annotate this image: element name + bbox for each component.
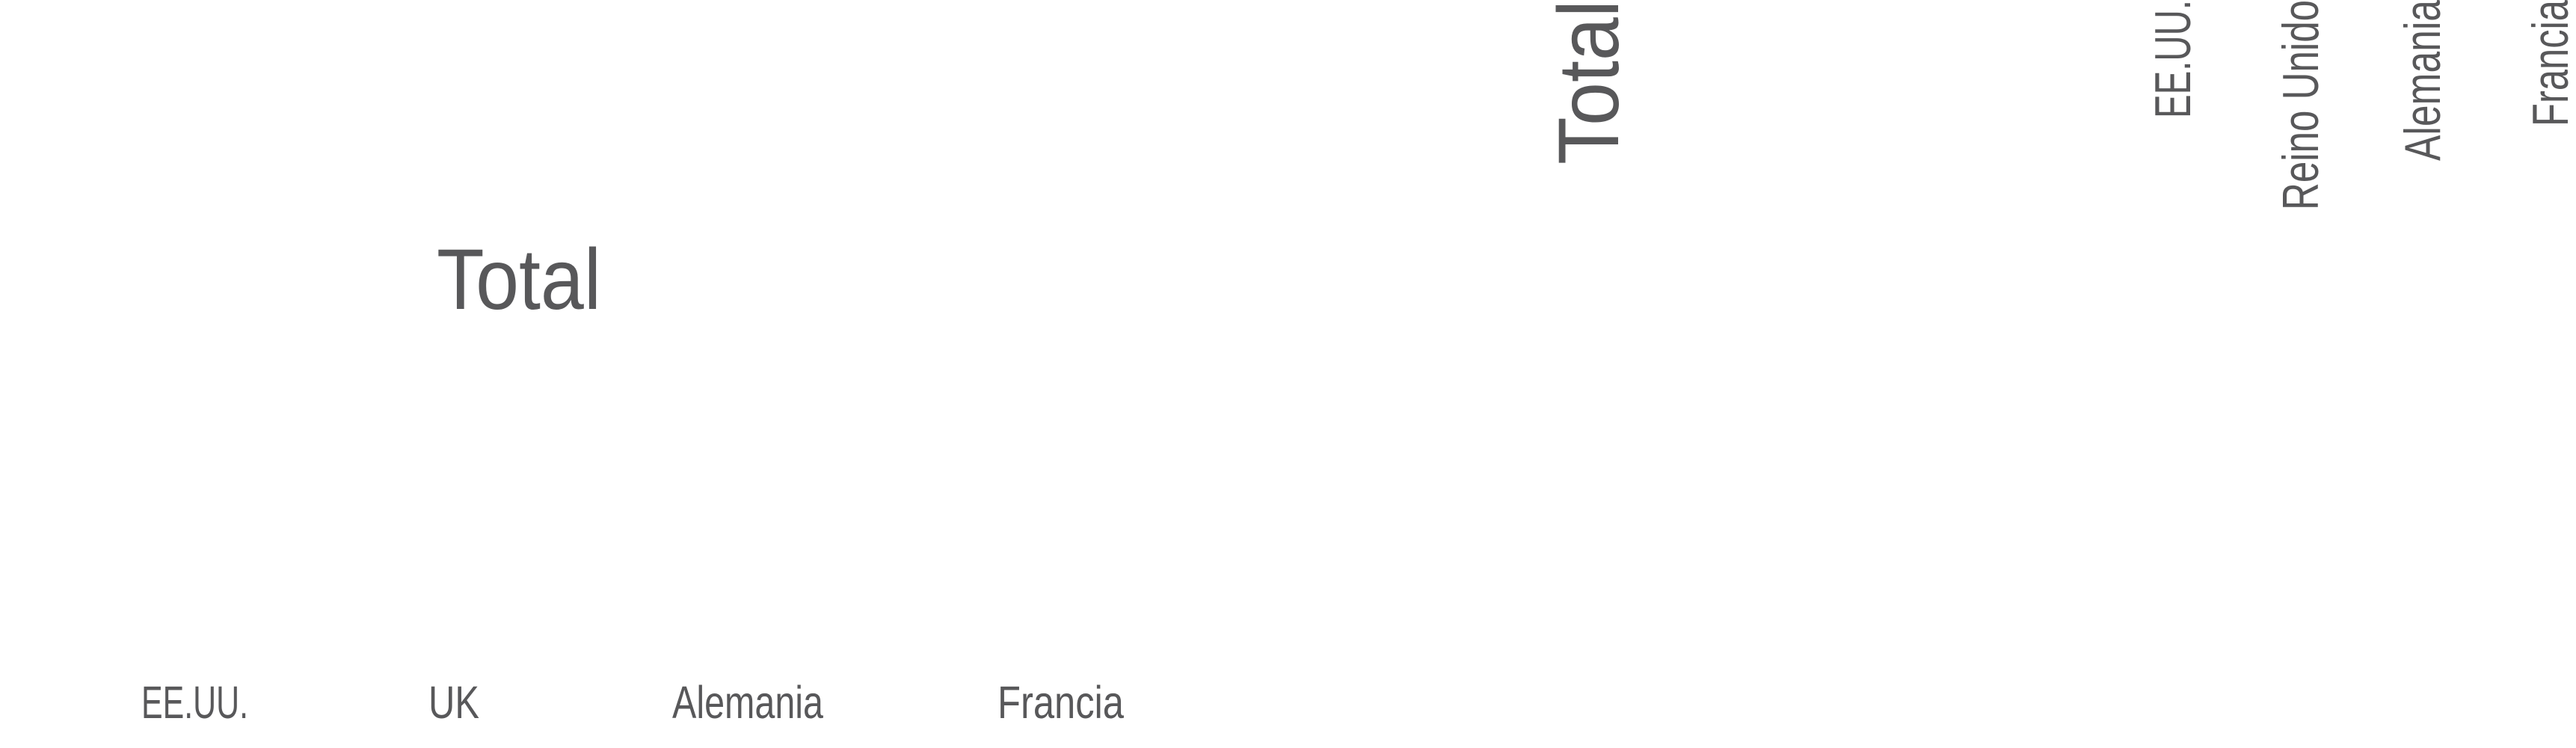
label: Alemania: Alemania bbox=[672, 677, 823, 728]
label: Francia: Francia bbox=[997, 677, 1124, 728]
label: EE.UU.: EE.UU. bbox=[141, 677, 248, 728]
heading: Total (horizontal): Total bbox=[437, 232, 601, 328]
label: UK: UK bbox=[428, 677, 479, 728]
axis labels: countries (rotated) bbox=[2145, 0, 2576, 210]
axis labels: countries (horizontal) bbox=[141, 677, 1124, 728]
